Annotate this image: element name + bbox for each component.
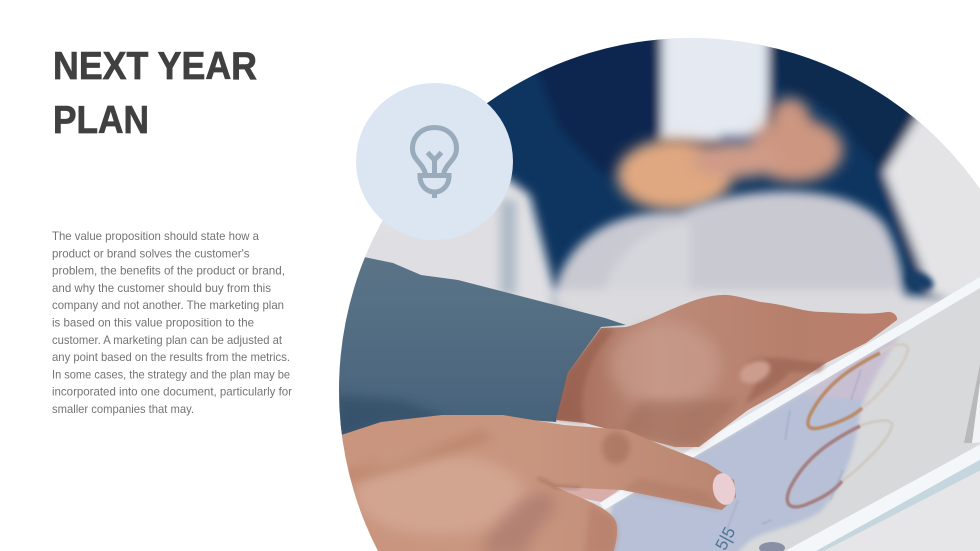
- palm highlight: [610, 323, 720, 407]
- body text block: product or brand solves the customer's: [52, 246, 250, 260]
- title: NEXT YEAR: [53, 45, 257, 88]
- circular photo: hands holding a tablet: [330, 20, 980, 551]
- thumb edge: [585, 505, 617, 551]
- blurred lap: [549, 184, 946, 318]
- lower hand shadow: [620, 400, 740, 447]
- body text block: is based on this value proposition to the: [52, 316, 254, 330]
- fingernail: [712, 473, 736, 505]
- body text block: smaller companies that may.: [52, 402, 194, 416]
- tablet right edge strip: [964, 365, 980, 443]
- tablet screen: [600, 280, 980, 551]
- body text block: any point based on the results from the metrics.: [52, 350, 290, 364]
- body text block: customer. A marketing plan can be adjusted at: [52, 333, 283, 347]
- web of thumb shadow: [480, 492, 556, 551]
- blurred background: seated person: [487, 38, 947, 310]
- knuckle: [602, 432, 630, 464]
- blurred hands: [617, 98, 843, 211]
- finger crease: [538, 478, 580, 488]
- body text block: problem, the benefits of the product or brand,: [52, 264, 285, 278]
- body text block: In some cases, the strategy and the plan may be: [52, 367, 290, 381]
- body text block: [52, 229, 292, 416]
- body text block: The value proposition should state how a: [52, 229, 259, 243]
- body text block: incorporated into one document, particularly for: [52, 385, 292, 399]
- icon: light bulb: [412, 128, 456, 198]
- thumb crease: [745, 358, 826, 405]
- title: PLAN: [53, 99, 149, 142]
- hand crease band: [348, 432, 486, 482]
- icon circle with light bulb: [356, 83, 513, 240]
- finger underside: [623, 482, 720, 510]
- wrist shadow: [556, 328, 615, 423]
- sleeve shadow: [339, 394, 436, 438]
- title: [53, 45, 257, 142]
- suit sleeve: [335, 250, 626, 437]
- tablet bezel: [600, 274, 980, 551]
- body text block: company and not another. The marketing plan: [52, 298, 284, 312]
- body text block: and why the customer should buy from this: [52, 281, 271, 295]
- tablet gauge rings: [787, 344, 908, 507]
- holding hand: [556, 295, 897, 447]
- thumb pad: [739, 359, 772, 384]
- pointing hand: [335, 415, 738, 551]
- dark blob behind tablet: [904, 269, 936, 293]
- tablet label and dot: [715, 526, 785, 551]
- back of hand highlight: [355, 455, 525, 535]
- middle finger under: [556, 487, 622, 502]
- tablet: [600, 274, 980, 551]
- bottom right backdrop: [800, 455, 980, 551]
- tablet screen details: [715, 370, 861, 530]
